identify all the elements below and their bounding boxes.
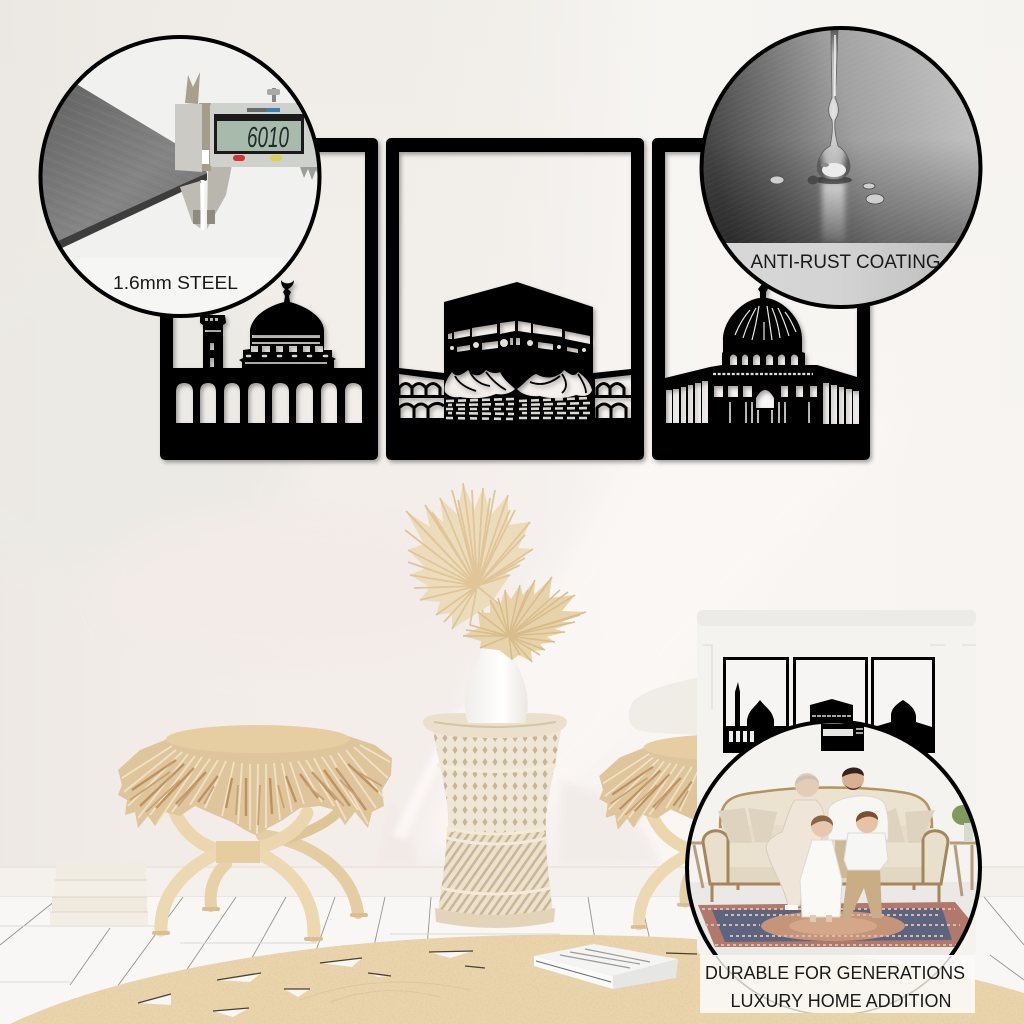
callout: anti-rust coating	[695, 25, 987, 313]
small droplets	[770, 176, 884, 204]
palm fan large	[405, 483, 533, 629]
stacked cream books	[50, 862, 148, 925]
baseboard	[0, 866, 1024, 897]
label: ANTI-RUST COATING	[750, 251, 940, 273]
folded knit blanket	[629, 678, 697, 735]
reflection	[822, 182, 845, 242]
label box	[700, 955, 975, 1015]
mini wall art	[723, 657, 935, 753]
ring	[40, 37, 320, 316]
colonnade arches	[399, 384, 626, 418]
water drop photo	[704, 30, 978, 305]
sunlight beam on wall	[0, 260, 900, 860]
label line two: LUXURY HOME ADDITION	[730, 990, 952, 1011]
label band	[726, 243, 956, 305]
callout: family lifestyle inset	[680, 610, 990, 1015]
sofa	[703, 788, 948, 904]
ring	[685, 720, 982, 955]
jute round rug	[10, 935, 1024, 1024]
caliper jaws	[175, 72, 232, 230]
soft shadows on wall	[375, 700, 660, 866]
label: 1.6mm STEEL	[113, 272, 238, 293]
masonry courses	[446, 399, 514, 401]
carpet	[698, 902, 970, 947]
father	[828, 767, 888, 878]
water stream and drop	[814, 30, 852, 184]
side tables	[690, 843, 978, 896]
label line one: DURABLE FOR GENERATIONS	[705, 962, 965, 983]
panel: centre Kaaba	[386, 138, 644, 460]
potted plant	[952, 805, 974, 842]
label band	[30, 258, 330, 328]
dried palm fans	[405, 483, 586, 662]
inset circle photo	[685, 720, 982, 955]
woven basket side table	[423, 713, 567, 928]
caliper display	[210, 88, 322, 180]
grandmother	[766, 773, 825, 910]
caliper photo	[42, 72, 318, 248]
mini kaaba lower fragment	[821, 724, 864, 751]
white plank floor	[0, 897, 1024, 1024]
boy	[842, 811, 888, 918]
kaaba dots	[450, 339, 586, 352]
ghost ring under label	[716, 956, 951, 1015]
stool legs	[154, 806, 366, 939]
callout: 1.6mm steel	[38, 35, 322, 318]
stool right partly hidden	[599, 735, 697, 930]
stool left	[118, 725, 392, 939]
girl	[800, 815, 842, 922]
woven seat top	[166, 725, 350, 753]
book on rug	[534, 944, 678, 989]
palm fan small	[463, 577, 586, 662]
inset room card	[697, 610, 976, 955]
dome dots	[247, 355, 327, 357]
grass fringe	[118, 736, 392, 836]
arcade dots	[713, 373, 813, 375]
white vase	[465, 647, 528, 723]
steel sheet	[30, 85, 207, 248]
kiswa folds	[455, 372, 586, 393]
panel: right dome of the rock	[652, 138, 870, 460]
ring	[702, 28, 980, 307]
caliper reading: 6010	[247, 122, 289, 154]
wall art triptych	[160, 138, 870, 460]
panel: left mosque	[160, 138, 378, 460]
dome ribs	[735, 306, 796, 340]
